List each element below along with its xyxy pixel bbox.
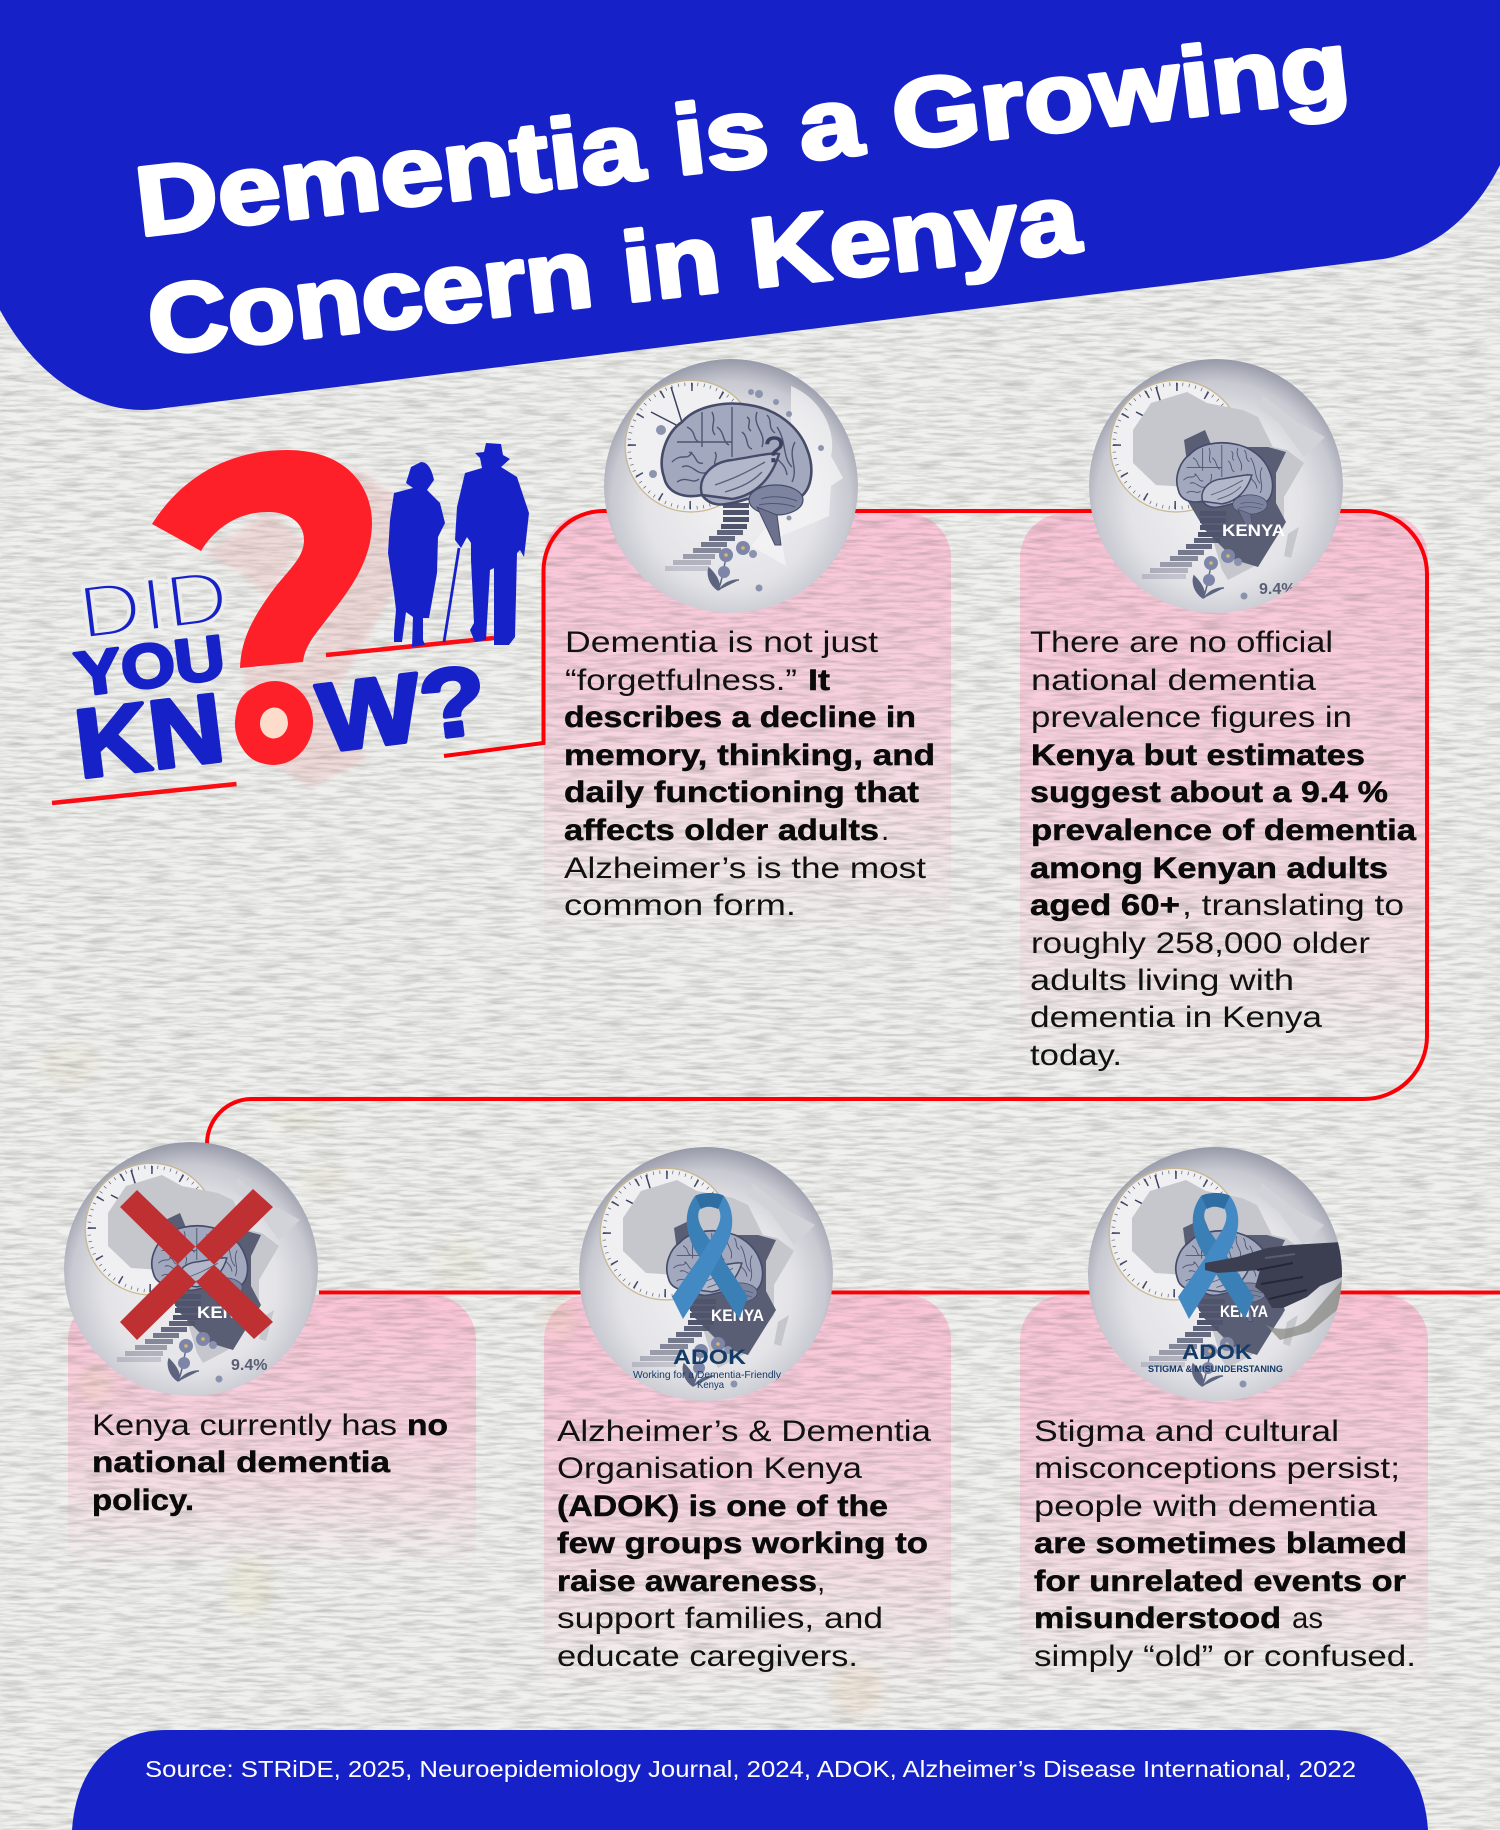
KENYA label under cross: KENYA <box>197 1303 260 1322</box>
text: ADOK description: raise awareness <box>557 1565 817 1598</box>
text: Kenya prevalence: There are no official <box>1030 626 1333 659</box>
text: ADOK description: , <box>817 1565 825 1598</box>
text: ADOK description: educate caregivers. <box>557 1640 858 1673</box>
text: KNOW?: O <box>225 658 313 791</box>
text: Kenya prevalence: dementia in Kenya <box>1030 1001 1323 1034</box>
text: Kenya prevalence <box>1030 626 1417 1072</box>
text: YOU: YOU <box>71 623 229 710</box>
text: stigma description: as <box>1292 1602 1323 1635</box>
text: ADOK description: (ADOK) is one of the <box>557 1490 888 1523</box>
header banner <box>0 0 1500 410</box>
9.4% label: 9.4% <box>1259 581 1295 598</box>
awareness ribbon <box>672 1193 748 1319</box>
text: Kenya prevalence: prevalence of dementia <box>1031 814 1417 847</box>
text: stigma description: simply “old” or confused. <box>1034 1640 1416 1673</box>
text: Kenya prevalence: roughly 258,000 older <box>1031 927 1370 960</box>
ADOK label: ADOK <box>673 1346 746 1369</box>
text: Kenya prevalence: today. <box>1030 1039 1122 1072</box>
title <box>130 9 1355 376</box>
pink panel: ADOK <box>544 1295 951 1690</box>
circle illustration: Kenya map with brain <box>1089 359 1343 613</box>
pink panel: no policy <box>68 1295 476 1570</box>
pink panel: dementia definition <box>544 513 951 935</box>
text: stigma description <box>1034 1415 1416 1673</box>
text: stigma description: misconceptions persist; <box>1034 1452 1400 1485</box>
text: ADOK description: Organisation Kenya <box>557 1452 863 1485</box>
KENYA label: KENYA <box>1222 521 1285 540</box>
silhouette: elderly man with cane <box>444 443 529 645</box>
text: stigma description: are sometimes blamed <box>1034 1527 1407 1560</box>
text: dementia definition: describes a decline in <box>564 701 916 734</box>
red question mark <box>152 450 372 668</box>
title: Concern in Kenya <box>142 162 1086 376</box>
pink panel: stigma <box>1020 1295 1428 1690</box>
text: dementia definition: common form. <box>564 889 796 922</box>
circle illustration: crossed-out Kenya map <box>64 1142 318 1396</box>
red connector line, lower panels <box>319 1290 1500 1294</box>
text: Kenya prevalence: prevalence figures in <box>1031 701 1352 734</box>
text: no national policy <box>92 1409 448 1517</box>
text: no national policy: policy. <box>92 1484 194 1517</box>
KENYA label: KENYA <box>1220 1302 1268 1321</box>
text: stigma description: Stigma and cultural <box>1034 1415 1339 1448</box>
text: Kenya prevalence: adults living with <box>1030 964 1294 997</box>
text: Kenya prevalence: national dementia <box>1031 664 1317 697</box>
text: dementia definition: affects older adults <box>564 814 879 847</box>
circle illustration: ribbon with pointing hand <box>1088 1147 1342 1401</box>
red underline under KNOW <box>52 784 236 803</box>
text: ADOK description <box>557 1415 932 1673</box>
text: Kenya prevalence: , translating to <box>1182 889 1404 922</box>
text: no national policy: national dementia <box>92 1446 391 1479</box>
footer banner <box>72 1730 1428 1830</box>
ADOK tagline: Kenya <box>697 1379 724 1391</box>
stains on the paper <box>40 1043 883 1716</box>
red cross <box>120 1189 273 1340</box>
pointing hand <box>1205 1242 1342 1340</box>
awareness ribbon <box>1178 1193 1254 1319</box>
text: dementia definition: Dementia is not just <box>565 626 878 659</box>
silhouette: elderly woman <box>388 462 445 647</box>
text: dementia definition: It <box>808 664 830 697</box>
circle illustration: ADOK ribbon <box>579 1147 833 1401</box>
text: dementia definition: . <box>881 814 889 847</box>
ADOK tagline: Working for a Dementia-Friendly <box>633 1369 782 1381</box>
circle illustration: brain and clock <box>604 359 858 613</box>
ADOK tagline <box>633 1370 781 1390</box>
text: dementia definition: Alzheimer’s is the most <box>564 852 926 885</box>
pink panel: Kenya prevalence <box>1020 513 1428 1075</box>
text: dementia definition: daily functioning that <box>564 776 919 809</box>
did you know graphic <box>52 443 529 803</box>
text: KNOW? <box>69 644 492 799</box>
title: Dementia is a Growing <box>130 9 1355 257</box>
red connector line, upper panels <box>207 511 1427 1145</box>
question mark in brain: ? <box>764 429 784 470</box>
text: Kenya prevalence: Kenya but estimates <box>1031 739 1365 772</box>
KENYA label: KENYA <box>711 1306 764 1325</box>
9.4% label: 9.4% <box>231 1357 267 1374</box>
text: ADOK description: few groups working to <box>557 1527 928 1560</box>
text: stigma description: for unrelated events or <box>1034 1565 1407 1598</box>
text: DID: DID <box>74 553 233 655</box>
text: Kenya prevalence: aged 60+ <box>1030 889 1180 922</box>
text: Kenya prevalence: among Kenyan adults <box>1030 852 1388 885</box>
text: no national policy: Kenya currently has <box>92 1409 397 1442</box>
source line: Source: STRiDE, 2025, Neuroepidemiology Journal, 2024, ADOK, Alzheimer’s Disease International, 2022 <box>145 1756 1356 1782</box>
text: Kenya prevalence: suggest about a 9.4 % <box>1030 776 1388 809</box>
text: KNOW?: W? <box>312 644 492 773</box>
long shadow of question mark <box>205 467 395 787</box>
red underline under figures <box>326 638 494 655</box>
ADOK label: ADOK <box>1182 1341 1252 1364</box>
text: dementia definition: memory, thinking, and <box>564 739 935 772</box>
text: dementia definition <box>564 626 935 922</box>
text: dementia definition: “forgetfulness.” <box>565 664 797 697</box>
text: stigma description: misunderstood <box>1034 1602 1281 1635</box>
text: ADOK description: Alzheimer’s & Dementia <box>557 1415 932 1448</box>
text: stigma description: people with dementia <box>1034 1490 1378 1523</box>
text: KNOW?: KN <box>69 673 229 799</box>
text: no national policy: no <box>407 1409 448 1442</box>
text: ADOK description: support families, and <box>557 1602 883 1635</box>
stigma tagline: STIGMA & MISUNDERSTANING <box>1148 1364 1283 1375</box>
